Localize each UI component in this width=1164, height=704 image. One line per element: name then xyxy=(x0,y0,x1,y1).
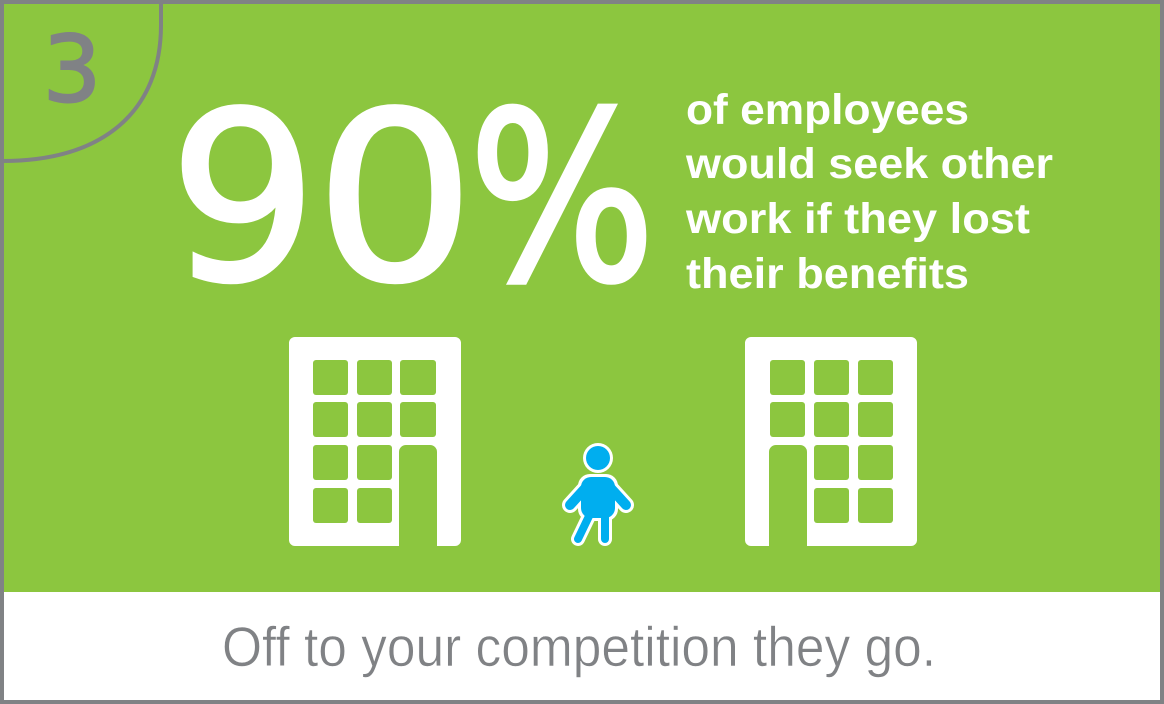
big statistic 90% xyxy=(169,63,655,334)
badge number 3: 3 xyxy=(43,16,101,123)
caption: Off to your competition they go. xyxy=(222,615,936,678)
icon: right office building xyxy=(745,337,917,546)
number badge quarter circle xyxy=(2,2,161,161)
big statistic 90%: 9 xyxy=(169,63,317,334)
icon: left office building xyxy=(289,337,461,546)
panel: white caption band xyxy=(0,592,1164,704)
big statistic 90%: 0 xyxy=(315,63,475,334)
statistic description: work if they lost xyxy=(685,195,1030,243)
statistic description: of employees xyxy=(686,86,969,134)
statistic description: would seek other xyxy=(685,140,1053,188)
icon: person walking xyxy=(570,443,626,539)
statistic description xyxy=(685,86,1053,298)
statistic description: their benefits xyxy=(686,250,969,298)
big statistic 90%: % xyxy=(469,63,655,334)
